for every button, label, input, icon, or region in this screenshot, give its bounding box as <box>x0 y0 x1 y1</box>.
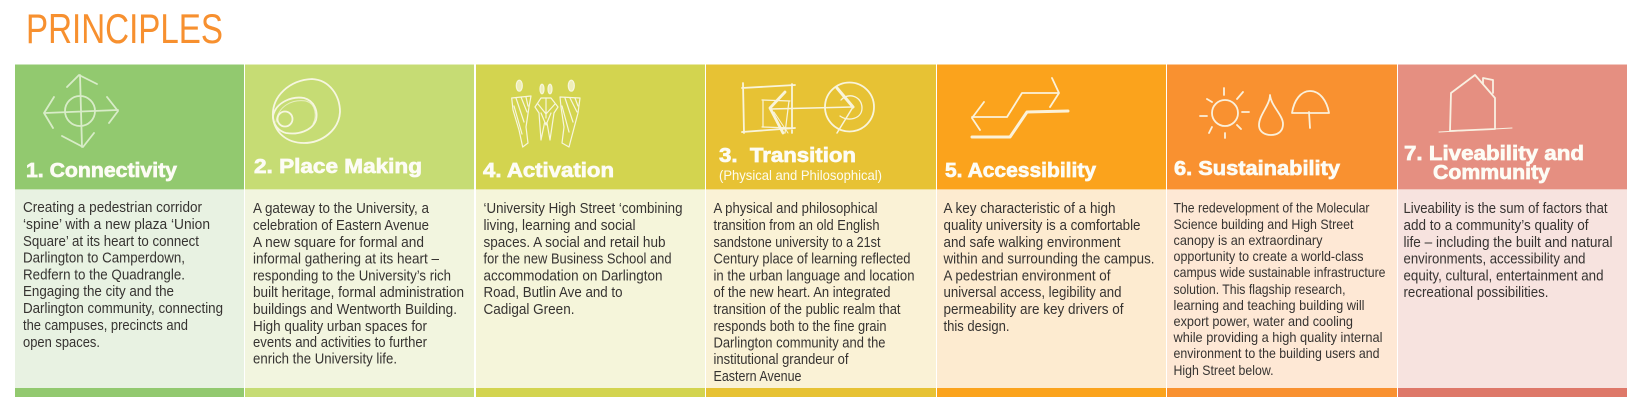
heading: sustainability: 6. Sustainability <box>1174 158 1341 180</box>
text: transition <box>714 201 915 385</box>
text: connectivity: Redfern to the Quadrangle. <box>23 268 185 284</box>
text: transition: Century place of learning reflected <box>714 252 911 268</box>
text: liveability: environments, accessibility and <box>1404 252 1586 268</box>
panel: transition <box>706 64 936 397</box>
text: place making: responding to the University’s rich <box>253 268 451 284</box>
text: sustainability: environment to the building users and <box>1174 345 1380 361</box>
text: sustainability: campus wide sustainable infrastructure <box>1174 264 1386 280</box>
text: accessibility: quality university is a comfortable <box>944 218 1141 234</box>
text: accessibility: permeability are key drivers of <box>944 302 1124 318</box>
text: accessibility: within and surrounding the campus. <box>943 252 1154 268</box>
panel: liveability and community <box>1398 64 1627 397</box>
text: connectivity: Engaging the city and the <box>23 284 174 300</box>
text: activation <box>484 201 683 318</box>
text: transition: institutional grandeur of <box>714 352 849 368</box>
icon: stepped path arrows <box>972 78 1068 137</box>
text: connectivity: Square’ at its heart to connect <box>23 234 199 250</box>
text: sustainability: Science building and High Street <box>1174 216 1354 232</box>
text: place making: informal gathering at its heart – <box>253 252 439 268</box>
text: transition: A physical and philosophical <box>714 201 878 217</box>
icon: concentric circles <box>273 79 340 143</box>
text: transition: Eastern Avenue <box>714 369 802 385</box>
text: sustainability <box>1173 200 1386 378</box>
text: connectivity: Darlington to Camperdown, <box>23 250 185 266</box>
panel: activation <box>476 64 705 397</box>
text: accessibility: this design. <box>944 319 1010 335</box>
heading: activation: 4. Activation <box>483 160 614 182</box>
text: place making: celebration of Eastern Avenue <box>253 218 429 234</box>
icon: house <box>1439 75 1512 132</box>
heading: transition: 3. Transition <box>719 145 856 167</box>
text: connectivity: ‘spine’ with a new plaza ‘Union <box>23 217 210 233</box>
text: transition: transition of the public realm that <box>714 302 901 318</box>
text: place making: A new square for formal and <box>253 235 424 251</box>
heading: place making: 2. Place Making <box>254 156 422 178</box>
text: connectivity: Darlington community, connecting <box>23 301 223 317</box>
icon: squares and circle transition <box>742 82 874 133</box>
text: place making: High quality urban spaces for <box>253 319 427 335</box>
text: activation: living, learning and social <box>484 218 636 234</box>
icon: sun, water drop and canopy <box>1200 88 1329 138</box>
text: activation: accommodation on Darlington <box>484 268 663 284</box>
heading: liveability and community: 7. Liveability and <box>1404 143 1584 165</box>
text: sustainability: export power, water and cooling <box>1174 313 1353 329</box>
text: liveability: Liveability is the sum of factors that <box>1404 201 1608 217</box>
text: connectivity: open spaces. <box>23 335 100 351</box>
text: accessibility: universal access, legibility and <box>944 285 1122 301</box>
text: place making <box>253 201 464 368</box>
text: liveability: recreational possibilities. <box>1404 285 1548 301</box>
text: place making: built heritage, formal administration <box>253 285 464 301</box>
panel: place making <box>245 64 474 397</box>
text: connectivity: Creating a pedestrian corridor <box>23 200 202 216</box>
text: connectivity <box>23 200 223 351</box>
subheading: physical and philosophical: (Physical and Philosophical) <box>719 167 882 183</box>
icon: compass arrows <box>44 75 118 147</box>
text: sustainability: opportunity to create a world-class <box>1174 248 1364 264</box>
text: liveability: equity, cultural, entertainment and <box>1404 268 1604 284</box>
text: connectivity: the campuses, precincts and <box>23 318 188 334</box>
text: sustainability: High Street below. <box>1174 362 1274 378</box>
text: sustainability: canopy is an extraordinary <box>1174 232 1322 248</box>
text: transition: Darlington community and the <box>714 336 886 352</box>
text: transition: sandstone university to a 21st <box>714 235 881 251</box>
text: transition: responds both to the fine grain <box>714 319 887 335</box>
text: place making: events and activities to further <box>253 335 427 351</box>
panel: connectivity <box>15 64 244 397</box>
text: activation: spaces. A social and retail hub <box>484 235 666 251</box>
text: transition: in the urban language and location <box>714 268 915 284</box>
text: transition: transition from an old English <box>714 218 880 234</box>
text: activation: for the new Business School and <box>484 252 672 268</box>
text: activation: Road, Butlin Ave and to <box>484 285 623 301</box>
heading: connectivity: 1. Connectivity <box>26 160 178 182</box>
text: accessibility <box>943 201 1154 335</box>
text: place making: A gateway to the University, a <box>253 201 429 217</box>
text: sustainability: while providing a high quality internal <box>1173 329 1382 345</box>
text: liveability: add to a community’s quality of <box>1404 218 1589 234</box>
heading: accessibility: 5. Accessibility <box>945 160 1097 182</box>
panel: accessibility <box>937 64 1166 397</box>
panel: sustainability <box>1167 64 1397 397</box>
heading: liveability and community <box>1404 143 1584 184</box>
text: transition: of the new heart. An integrated <box>714 285 891 301</box>
text: activation: Cadigal Green. <box>484 302 574 318</box>
title: PRINCIPLES <box>26 5 223 52</box>
text: activation: ‘University High Street ‘combining <box>484 201 683 217</box>
text: place making: enrich the University life. <box>253 352 397 368</box>
text: sustainability: learning and teaching building will <box>1174 297 1364 313</box>
text: accessibility: A pedestrian environment of <box>944 268 1111 284</box>
text: accessibility: A key characteristic of a high <box>944 201 1116 217</box>
icon: three people <box>512 80 580 147</box>
text: place making: buildings and Wentworth Building. <box>253 302 457 318</box>
text: liveability <box>1404 201 1612 301</box>
text: accessibility: and safe walking environment <box>944 235 1121 251</box>
text: sustainability: The redevelopment of the Molecular <box>1174 200 1370 216</box>
text: liveability: life – including the built and natural <box>1404 235 1612 251</box>
text: sustainability: solution. This flagship research, <box>1174 281 1346 297</box>
heading: liveability and community: Community <box>1433 162 1551 184</box>
